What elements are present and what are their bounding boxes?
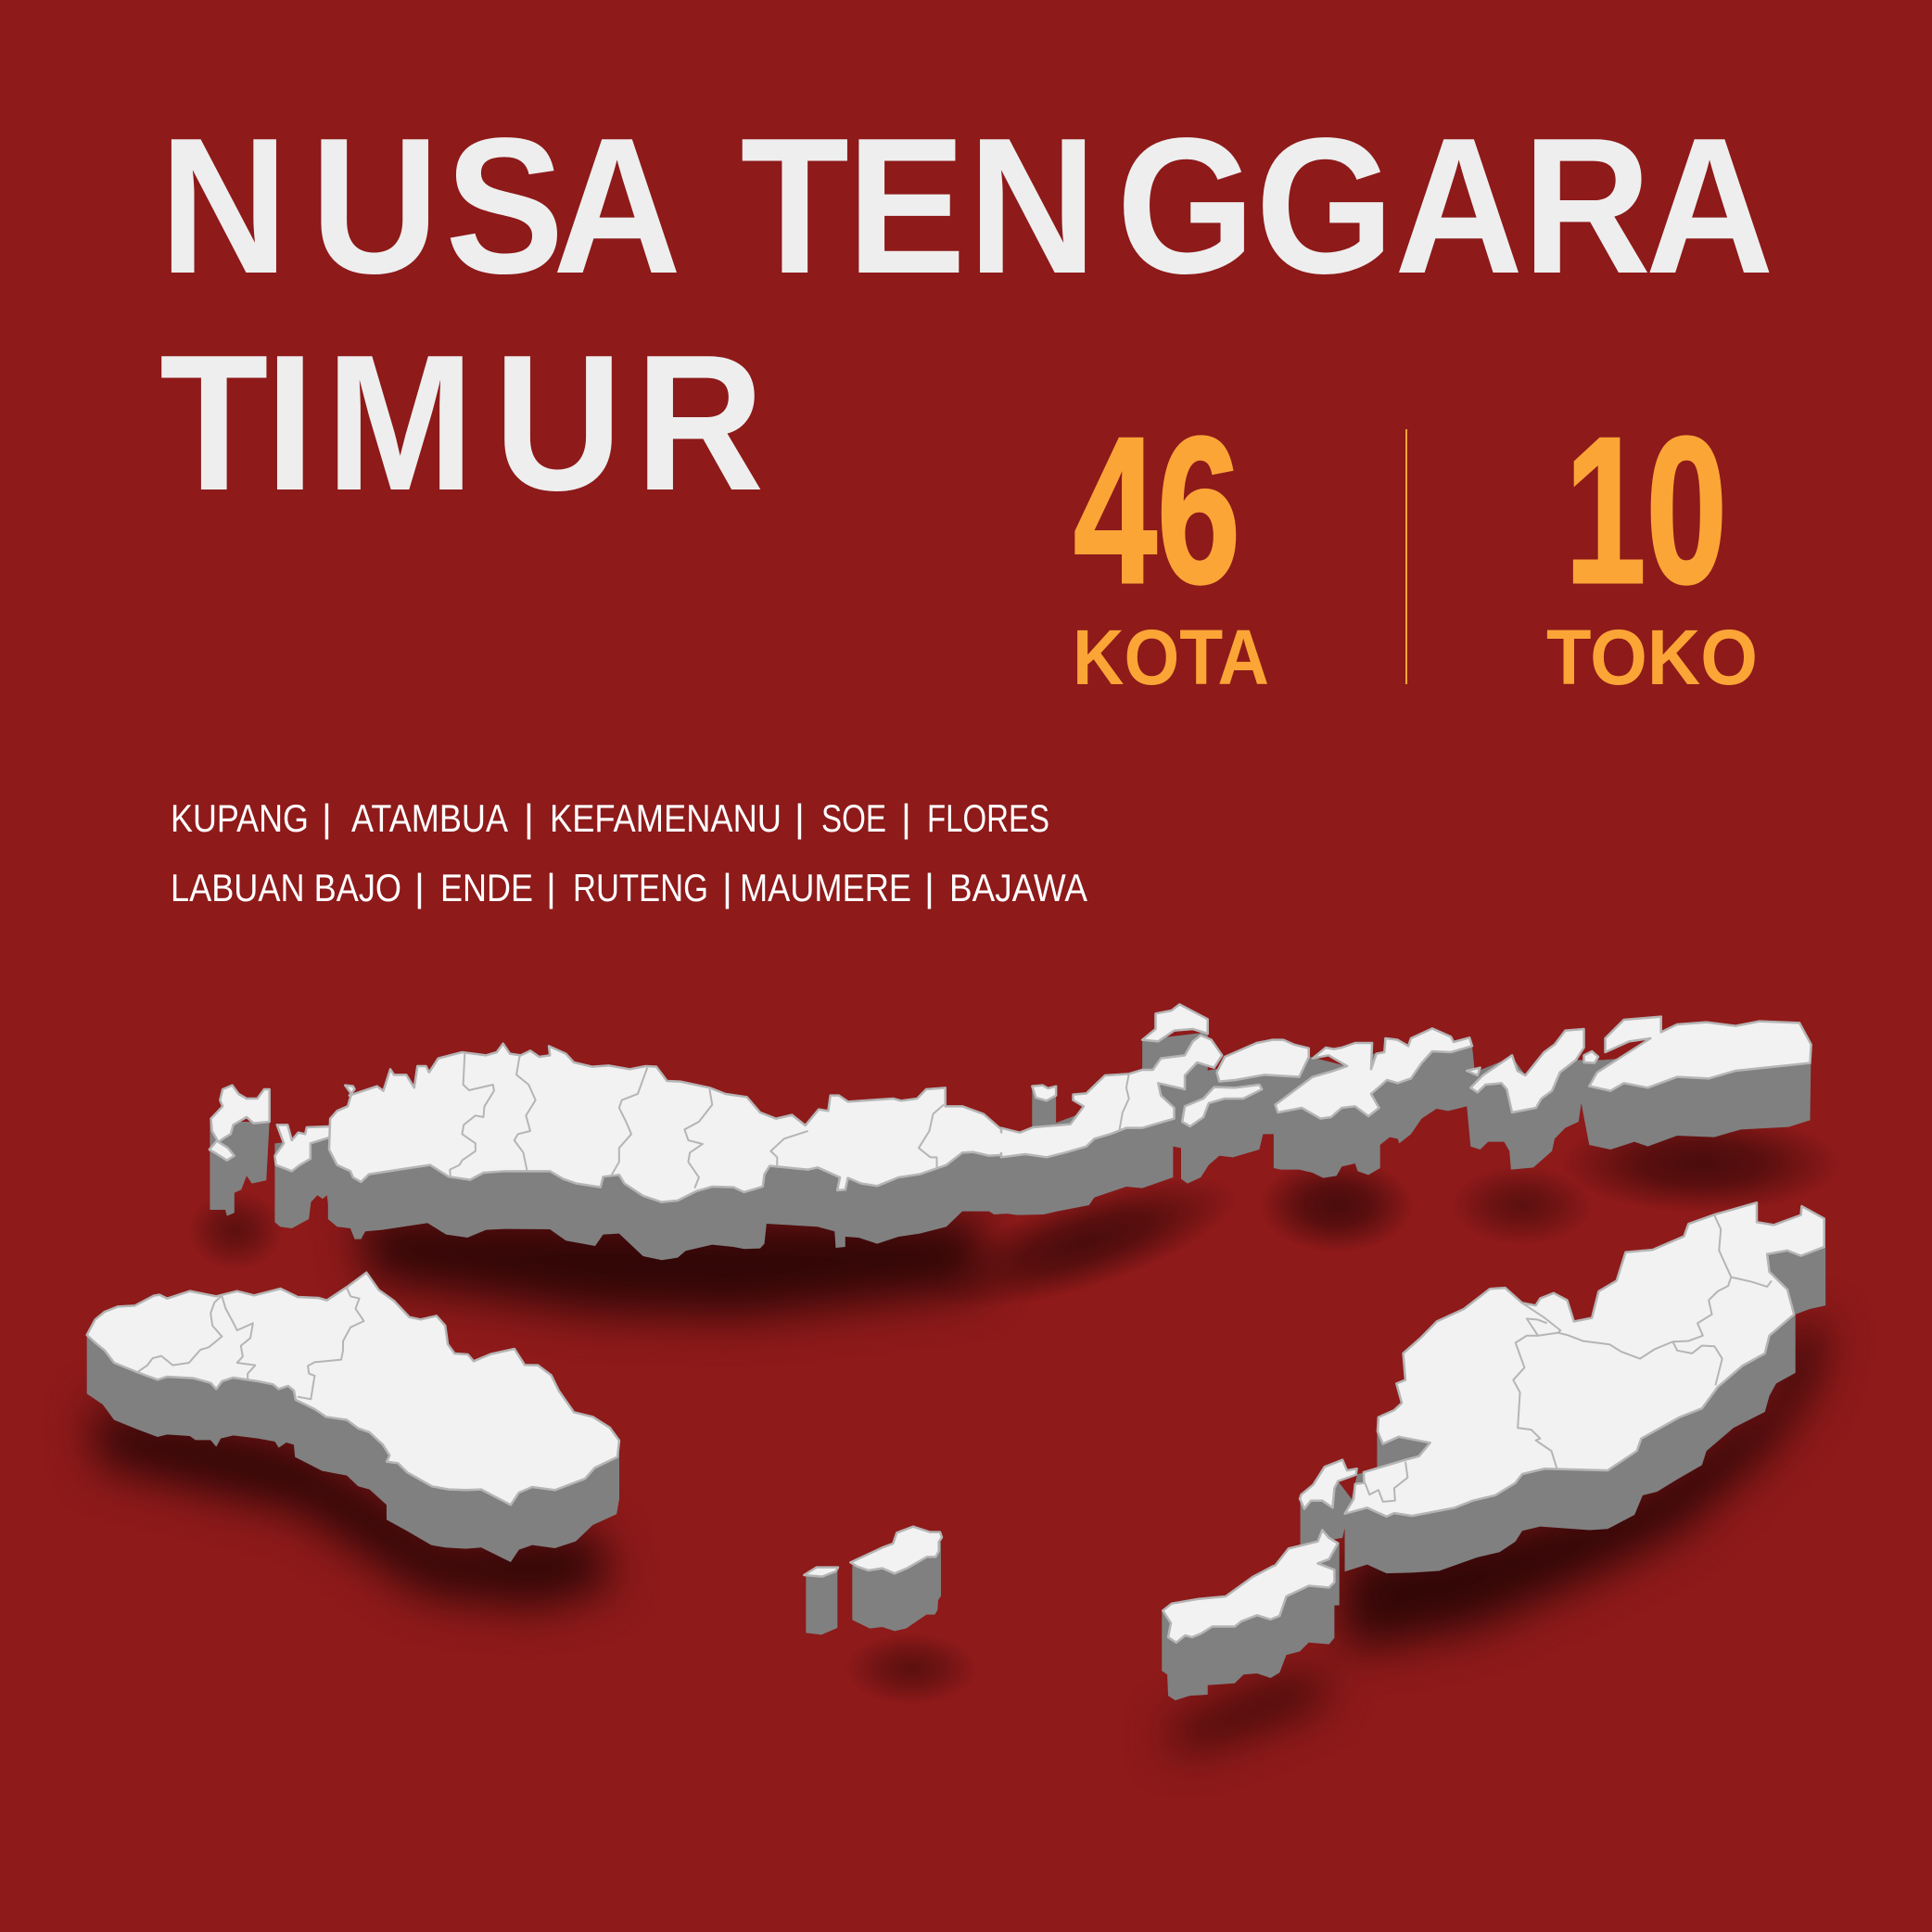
island strip: Flores and neighbours [210,1004,1811,1260]
stat: 10 toko [1546,393,1758,701]
city list: RUTENG [573,866,708,909]
stat: 10 toko: TOKO [1546,614,1758,701]
stat: 46 kota [1073,393,1269,701]
island: small pair [804,1527,942,1634]
city list: | [924,866,934,909]
stat: 46 kota: KOTA [1073,614,1269,701]
title: TIMUR [159,314,764,531]
map [87,1004,1825,1700]
city list [171,796,1087,909]
city list: MAUMERE [740,866,911,909]
city list: LABUAN BAJO [171,866,401,909]
title [159,97,1774,531]
city list: | [322,796,332,840]
city list: ENDE [440,866,533,909]
city list: BAJAWA [949,866,1087,909]
island: Timor group [1162,1202,1825,1700]
city list: | [546,866,556,909]
stat: 10 toko: 10 [1565,393,1727,627]
city list: ATAMBUA [351,796,508,840]
stat: 46 kota: 46 [1074,393,1240,627]
city list: | [794,796,805,840]
city list: KEFAMENANU [550,796,782,840]
city list: | [722,866,732,909]
city list: SOE [821,796,886,840]
island: Sumba [87,1273,619,1562]
title: NUSA TENGGARA [159,97,1774,314]
city list: | [414,866,425,909]
city list: | [524,796,534,840]
city list: | [901,796,911,840]
divider [1405,429,1407,684]
city list: FLORES [927,796,1049,840]
map shadows [92,1115,1840,1750]
city list: KUPANG [171,796,309,840]
